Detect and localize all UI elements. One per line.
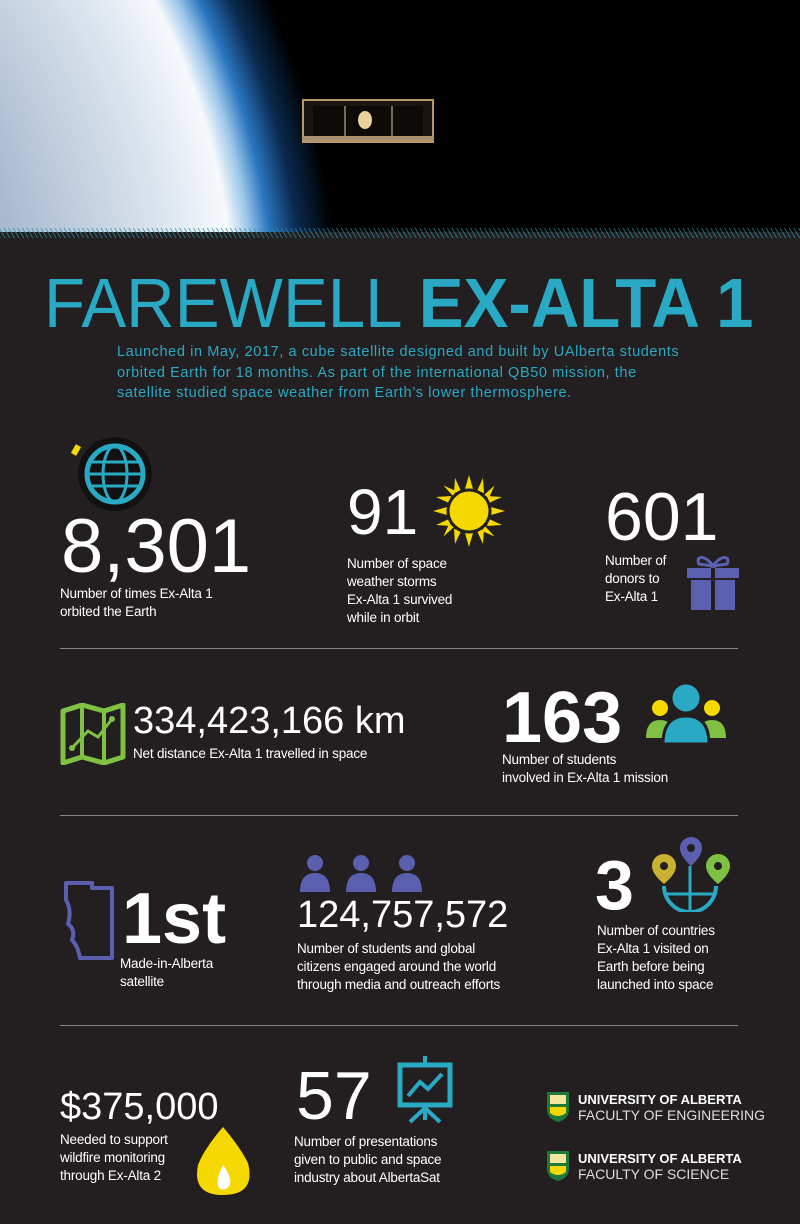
label: orbited the Earth <box>60 604 156 619</box>
stat: presentations <box>294 1056 452 1185</box>
stat: donors: 601 <box>605 479 718 555</box>
stat: engaged: citizens engaged around the world <box>297 959 496 974</box>
stat: countries: Number of countries <box>597 923 715 938</box>
icon: gift <box>687 556 739 610</box>
number: 8,301 <box>61 504 251 589</box>
icon: presentation board <box>398 1056 452 1124</box>
stat: funding: $375,000 <box>60 1086 218 1128</box>
logo: engineering: UNIVERSITY OF ALBERTA <box>578 1092 742 1107</box>
stat: engaged: Number of students and global <box>297 941 475 956</box>
logo: engineering: FACULTY OF ENGINEERING <box>578 1107 765 1123</box>
stat: countries: Ex-Alta 1 visited on <box>597 941 709 956</box>
stat: presentations: given to public and space <box>294 1152 441 1167</box>
title: FAREWELL EX-ALTA 1 <box>44 264 753 342</box>
stat: presentations: Number of presentations <box>294 1134 437 1149</box>
stat: donors: Ex-Alta 1 <box>605 589 658 604</box>
hatched teal band <box>0 228 800 238</box>
intro text: Launched in May, 2017, a cube satellite designed and built by UAlberta students <box>117 344 679 360</box>
icon: people <box>646 684 726 742</box>
stat: engaged: 124,757,572 <box>297 894 508 936</box>
stat: funding: through Ex-Alta 2 <box>60 1168 161 1183</box>
stat: presentations: 57 <box>296 1058 372 1134</box>
stat: storms: Number of space <box>347 556 447 571</box>
icon: map <box>60 703 126 765</box>
stat: engaged: through media and outreach efforts <box>297 977 500 992</box>
stat: countries <box>595 837 730 992</box>
logo: engineering <box>547 1092 765 1123</box>
intro text: orbited Earth for 18 months. As part of the international QB50 mission, the <box>117 364 637 380</box>
logo: science: FACULTY OF SCIENCE <box>578 1166 729 1182</box>
label <box>60 586 213 619</box>
stat: engaged <box>297 855 508 992</box>
stat: students: Number of students <box>502 752 616 767</box>
stat: storms <box>347 475 505 625</box>
stat: funding: Needed to support <box>60 1132 168 1147</box>
icon: sun <box>433 475 505 547</box>
stat: 1st <box>64 879 226 989</box>
stat: donors: Number of <box>605 553 666 568</box>
icon: Alberta outline <box>64 881 114 960</box>
icon: flame <box>197 1127 250 1195</box>
stat: distance: Net distance Ex-Alta 1 travelled in space <box>133 746 367 761</box>
header photo: earth and satellite <box>0 0 800 232</box>
stat: countries: 3 <box>595 846 634 924</box>
intro text: satellite studied space weather from Earth’s lower thermosphere. <box>117 385 572 401</box>
stat: orbits <box>60 437 251 619</box>
icon: three persons <box>300 855 422 892</box>
icon: globe <box>71 437 152 511</box>
stat: storms: while in orbit <box>347 610 419 625</box>
intro text <box>117 344 679 401</box>
logo: science <box>547 1151 742 1182</box>
stat: students: involved in Ex-Alta 1 mission <box>502 770 668 785</box>
stat: storms: 91 <box>347 476 418 548</box>
logo: science: UNIVERSITY OF ALBERTA <box>578 1151 742 1166</box>
stat: 1st: 1st <box>122 879 226 959</box>
stat: storms: Ex-Alta 1 survived <box>347 592 452 607</box>
stat: presentations: industry about AlbertaSat <box>294 1170 440 1185</box>
stat: funding <box>60 1086 250 1195</box>
stat: funding: wildfire monitoring <box>60 1150 165 1165</box>
stat: 1st: satellite <box>120 974 164 989</box>
stat: donors <box>605 479 739 610</box>
stat: donors: donors to <box>605 571 660 586</box>
label: Number of times Ex-Alta 1 <box>60 586 213 601</box>
stat: distance: 334,423,166 km <box>133 700 406 742</box>
stat: students: 163 <box>502 678 622 758</box>
stat: distance <box>60 700 406 765</box>
stat: countries: launched into space <box>597 977 713 992</box>
stat: countries: Earth before being <box>597 959 704 974</box>
stat: storms: weather storms <box>347 574 436 589</box>
satellite <box>303 100 433 142</box>
stat: 1st: Made-in-Alberta <box>120 956 213 971</box>
stat: students <box>502 678 726 785</box>
icon: globe with pins <box>652 837 730 912</box>
